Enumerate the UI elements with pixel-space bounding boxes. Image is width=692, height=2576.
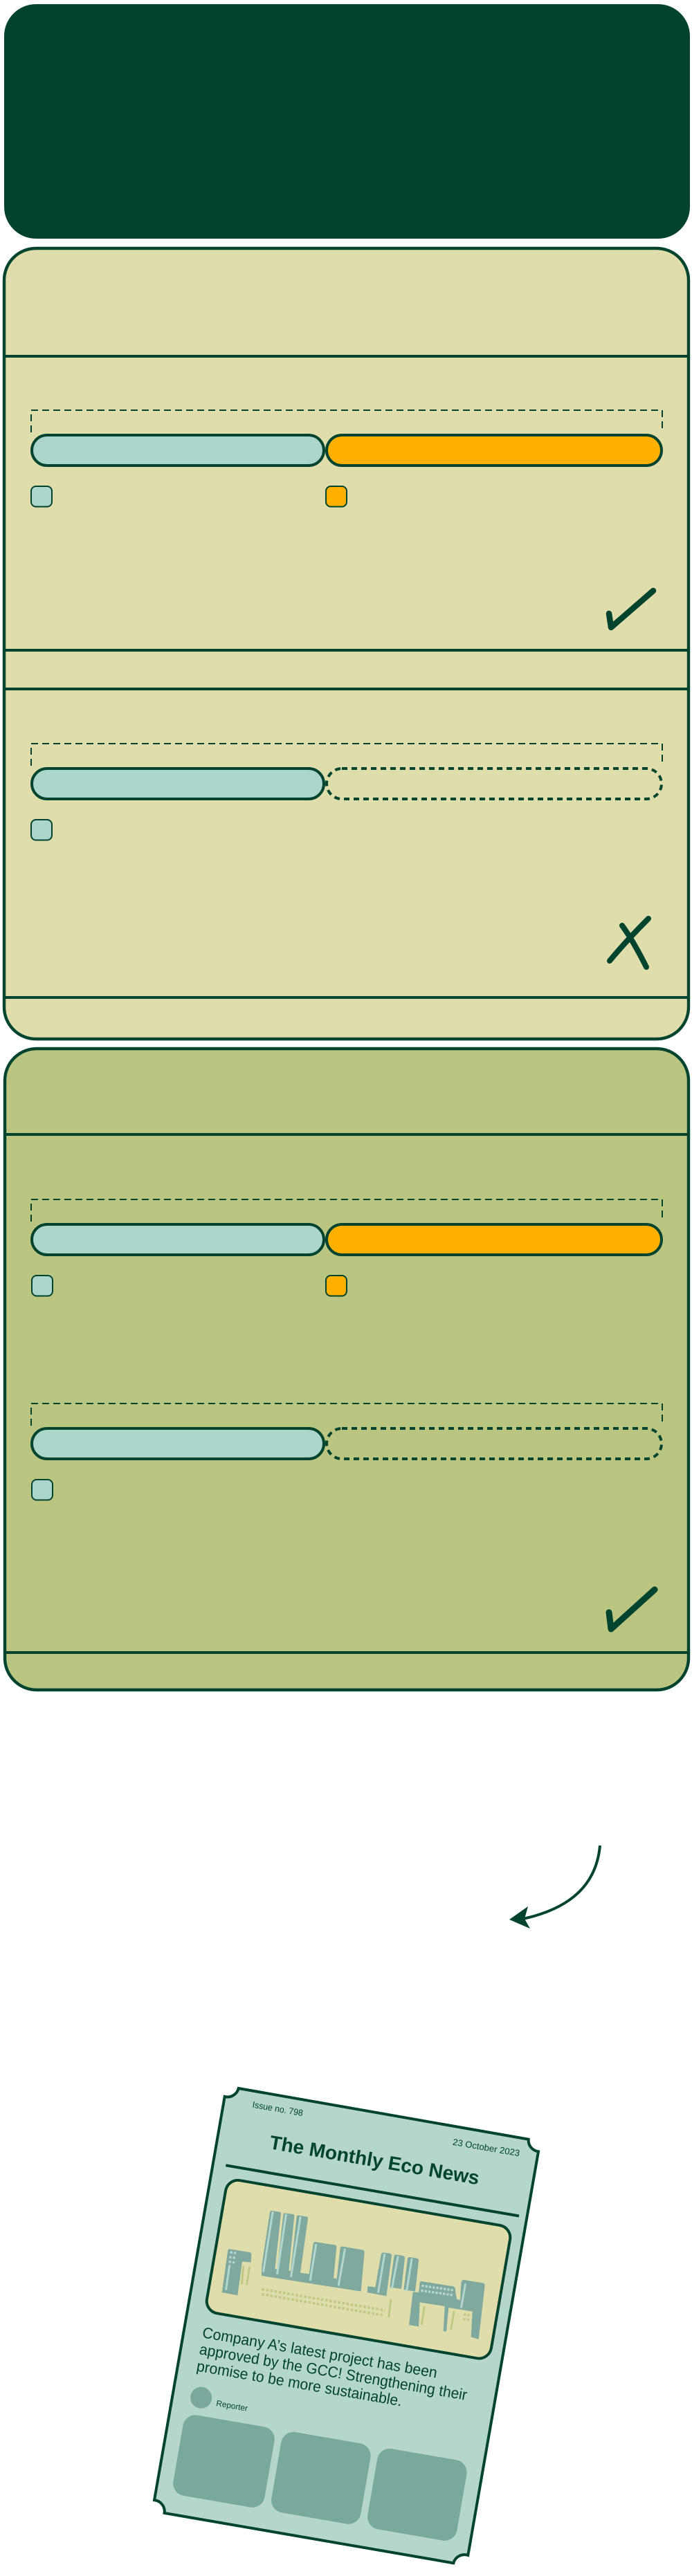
article text: promise to be more sustainable.	[195, 2357, 403, 2409]
reporter avatar	[189, 2385, 214, 2410]
thumbnail placeholders	[171, 2413, 468, 2543]
panel: first comparison	[4, 248, 689, 1039]
article text	[195, 2324, 471, 2420]
date: 23 October 2023	[452, 2137, 520, 2158]
panel: second comparison	[5, 1049, 689, 1690]
reporter label: Reporter	[215, 2398, 248, 2413]
legend swatch: teal	[31, 486, 52, 506]
bar: second row teal segment	[32, 1428, 324, 1459]
newspaper title: The Monthly Eco News	[268, 2131, 481, 2189]
skyline illustration	[222, 2211, 485, 2339]
issue number: Issue no. 798	[252, 2099, 304, 2118]
bar: first row teal segment	[32, 435, 324, 466]
image card	[205, 2178, 512, 2360]
bar: second row teal segment	[32, 769, 324, 799]
legend swatch: orange	[326, 486, 347, 506]
bar: second row dashed empty segment	[327, 769, 662, 799]
bracket: first row	[31, 1199, 662, 1222]
header banner	[4, 4, 690, 239]
icon: cross mark	[610, 919, 648, 967]
arrow: curved pointer to newspaper	[509, 1846, 600, 1929]
newspaper page outline	[154, 2088, 538, 2563]
legend swatch: teal	[31, 820, 52, 840]
bracket: first row	[31, 410, 662, 432]
article text: Company A’s latest project has been	[201, 2324, 439, 2382]
bar: first row orange segment	[327, 435, 662, 466]
bar: second row dashed empty segment	[327, 1428, 662, 1459]
bracket: second row	[31, 1404, 662, 1426]
legend swatch: teal	[32, 1276, 53, 1296]
illustration: newspaper	[154, 2088, 538, 2563]
article text: approved by the GCC! Strengthening their	[198, 2340, 468, 2404]
bar: first row teal segment	[32, 1224, 324, 1255]
bar: first row orange segment	[327, 1224, 662, 1255]
icon: check mark	[609, 591, 653, 627]
icon: check mark	[609, 1590, 655, 1629]
bracket: second row	[31, 744, 662, 766]
legend swatch: teal	[32, 1480, 53, 1500]
newspaper text and blocks	[169, 2097, 531, 2544]
legend swatch: orange	[326, 1276, 347, 1296]
